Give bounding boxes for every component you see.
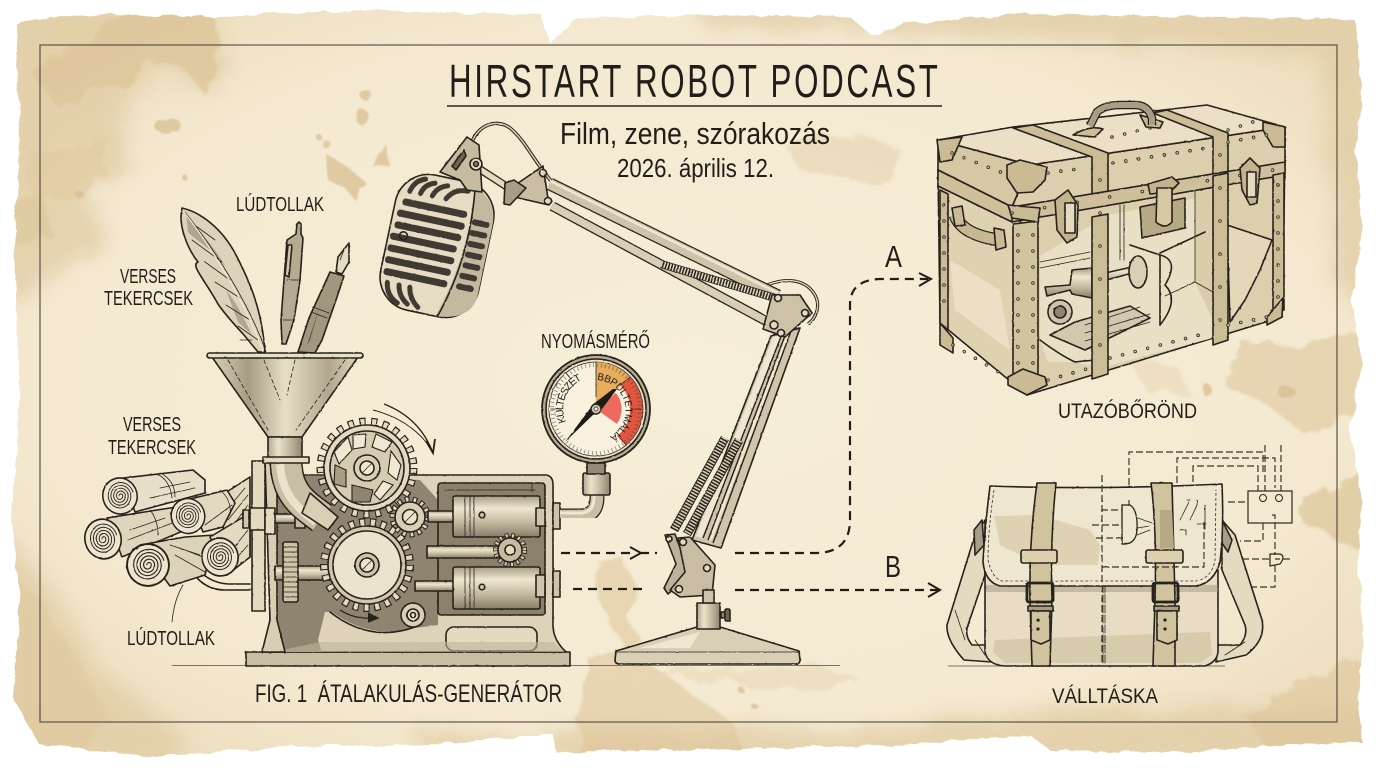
corners: [937, 122, 1285, 395]
label: VERSES TEKERCSEK top: TEKERCSEK: [104, 288, 193, 310]
needle: [565, 389, 617, 442]
label: LÚDTOLLAK lower: LÚDTOLLAK: [127, 627, 215, 650]
bag circuit overlay: [1092, 475, 1206, 665]
dark housing left: [270, 476, 438, 652]
cable: [472, 123, 552, 182]
date: 2026. április 12.: [617, 153, 774, 183]
gauge: nyomásmérő: [541, 354, 651, 464]
microphone lamp arm: [374, 123, 818, 664]
machine: átalakulás-generátor: [207, 353, 570, 666]
figure caption: FIG. 1 ÁTALAKULÁS-GENERÁTOR: [255, 679, 562, 708]
elbow pipe: [263, 457, 338, 530]
fountain pen: [298, 243, 349, 353]
trunk: utazóbőrönd: [937, 105, 1285, 395]
spirals: [99, 474, 141, 518]
rotation arrow bottom: [340, 610, 378, 622]
label: LÚDTOLLAK top: LÚDTOLLAK: [236, 193, 324, 216]
label: VERSES TEKERCSEK lower: VERSES: [123, 414, 181, 436]
microphone: [374, 168, 500, 324]
top handle: [1073, 105, 1163, 137]
label: A: A: [885, 239, 902, 274]
cutaway interior: [1040, 190, 1272, 368]
flap: [983, 484, 1223, 586]
label: B: B: [885, 549, 901, 584]
mic yoke: [440, 137, 482, 192]
upper piston: [453, 496, 545, 537]
shoulder strap left: [947, 520, 992, 662]
upper arm: [550, 181, 778, 322]
left column: [252, 461, 265, 611]
label: VERSES TEKERCSEK top: [104, 266, 193, 310]
buckles: [1027, 583, 1178, 602]
head bracket: [478, 166, 552, 205]
leader line: [172, 585, 183, 622]
strap keepers: [1021, 550, 1057, 563]
gauge labels: [554, 373, 632, 443]
arrow B: [573, 583, 940, 597]
stand base: [615, 590, 800, 664]
rivets: [944, 118, 1285, 380]
gauge labels: KÜLTÉSZET: [554, 374, 580, 424]
left face: [938, 170, 1027, 395]
bag: válltáska: [947, 475, 1263, 666]
subtitle: Film, zene, szórakozás: [560, 116, 830, 151]
top straps: [1013, 110, 1228, 195]
straps: [1030, 483, 1056, 666]
lower crescent: [330, 612, 420, 633]
feather: [181, 208, 266, 352]
gauge labels: BBPULTETMÁLIÁS: [598, 373, 632, 443]
ink droplets: [76, 90, 1295, 710]
elbow joint: [763, 294, 812, 337]
front face: [1020, 160, 1285, 395]
top face: [938, 105, 1285, 165]
lower gear: [325, 523, 409, 607]
label: VERSES TEKERCSEK lower: TEKERCSEK: [108, 437, 196, 459]
lower slot: [446, 627, 537, 651]
lower piston: [453, 567, 545, 609]
scrolls: [80, 470, 250, 591]
pressure pipe: [560, 457, 610, 516]
body: [985, 570, 1218, 666]
lower arm: [692, 328, 800, 548]
label: VÁLLTÁSKA: VÁLLTÁSKA: [1052, 685, 1158, 708]
main frame: [262, 475, 566, 652]
right knobs: [553, 503, 560, 597]
ballpoint pen: [281, 222, 303, 344]
funnel: [207, 353, 363, 459]
scroll bodies: [123, 470, 205, 512]
title: HIRSTART ROBOT PODCAST: [449, 56, 938, 108]
rotation arrow top: [373, 404, 435, 453]
top gear: [322, 422, 412, 514]
eccentric roller: [401, 603, 425, 627]
vertical straps: [940, 173, 1284, 381]
upper shaft: [243, 508, 305, 534]
piston housing: [438, 483, 545, 615]
circuit schematic: [1129, 445, 1292, 587]
ground lines: [172, 664, 1225, 667]
tiny gear: [496, 536, 524, 564]
label: NYOMÁSMÉRŐ: NYOMÁSMÉRŐ: [541, 330, 650, 353]
small gear: [393, 500, 427, 534]
lid left face: [938, 140, 1030, 207]
label: VERSES TEKERCSEK top: VERSES: [120, 266, 176, 288]
lid front face: [1012, 127, 1285, 207]
label: UTAZÓBŐRÖND: UTAZÓBŐRÖND: [1058, 400, 1197, 423]
base joint: [664, 534, 715, 597]
side handle: [952, 206, 1006, 250]
lower springs: [674, 438, 739, 534]
upper spring: [661, 264, 775, 298]
lower shaft and flywheel: [275, 542, 335, 602]
icon: feather and pens: [181, 208, 349, 353]
arrow A: [561, 273, 931, 559]
lid band: [938, 162, 1285, 222]
shoulder strap right: [1216, 520, 1263, 662]
connecting rods: [415, 511, 501, 591]
latches: [1055, 158, 1260, 243]
pipes to machine: [193, 568, 250, 590]
base plate: [246, 652, 570, 666]
label: VERSES TEKERCSEK lower: [108, 414, 196, 459]
